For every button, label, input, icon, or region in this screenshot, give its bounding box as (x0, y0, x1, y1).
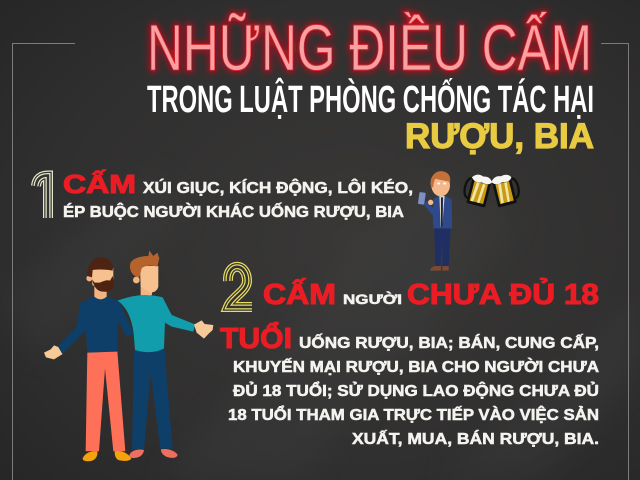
shoes (83, 451, 131, 461)
hand (44, 345, 63, 359)
item 2 text block: 18 TUỔI THAM GIA TRỰC TIẾP VÀO VIỆC SẢN (228, 405, 599, 424)
item 2 text block: KHUYẾN MẠI RƯỢU, BIA CHO NGƯỜI CHƯA (233, 357, 599, 376)
hair (431, 171, 450, 187)
hair and beard (87, 257, 115, 292)
face (92, 268, 113, 290)
eyes (437, 183, 446, 184)
ear (133, 277, 140, 283)
item 2 text block: XUẤT, MUA, BÁN RƯỢU, BIA. (352, 429, 599, 448)
shoes (430, 266, 449, 271)
numeral 2 (228, 267, 252, 307)
decorative frame: left bracket (12, 44, 75, 480)
legs (434, 228, 451, 266)
sweater (58, 297, 134, 354)
jacket (424, 196, 452, 228)
neck (141, 283, 152, 296)
title (147, 11, 594, 156)
shirt and tie (439, 196, 445, 227)
decorative frame: right bracket (601, 44, 628, 480)
item 1 (36, 169, 413, 221)
ear (86, 275, 92, 281)
hair (130, 251, 159, 277)
pants (86, 351, 125, 451)
head (431, 174, 450, 196)
numeral 1 (36, 176, 48, 218)
pants (132, 349, 173, 449)
item 2 text block: UỐNG RƯỢU, BIA; BÁN, CUNG CẤP, (299, 332, 599, 352)
item 1 red keyword: CẤM (63, 169, 136, 199)
man with beard (44, 257, 134, 461)
item 1 text line 1: XÚI GIỤC, KÍCH ĐỘNG, LÔI KÉO, (143, 178, 413, 197)
man in teal (117, 251, 213, 458)
item 2 red word: TUỔI (220, 321, 292, 355)
item 1 text line 2: ÉP BUỘC NGƯỜI KHÁC UỐNG RƯỢU, BIA (63, 201, 404, 221)
face (140, 266, 158, 293)
item 2 connecting word: NGƯỜI (343, 290, 402, 307)
left mug (461, 172, 493, 208)
title line 3: RƯỢU, BIA (405, 117, 594, 156)
illustration: two men (44, 251, 213, 461)
phone (418, 192, 426, 205)
hand (194, 320, 213, 339)
icon: beer mugs (461, 172, 522, 208)
item 2 text block (228, 332, 599, 448)
item 2 red phrase: CHƯA ĐỦ 18 (407, 277, 599, 311)
sweater (117, 295, 195, 352)
icon: businessman with phone (418, 171, 452, 271)
shoes (129, 449, 178, 458)
item 2 (220, 267, 599, 448)
right mug (490, 172, 522, 208)
item 2 red keyword: CẤM (263, 277, 336, 311)
item 2 text block: ĐỦ 18 TUỔI; SỬ DỤNG LAO ĐỘNG CHƯA ĐỦ (233, 381, 599, 400)
hand (428, 200, 433, 205)
neck (94, 287, 107, 299)
